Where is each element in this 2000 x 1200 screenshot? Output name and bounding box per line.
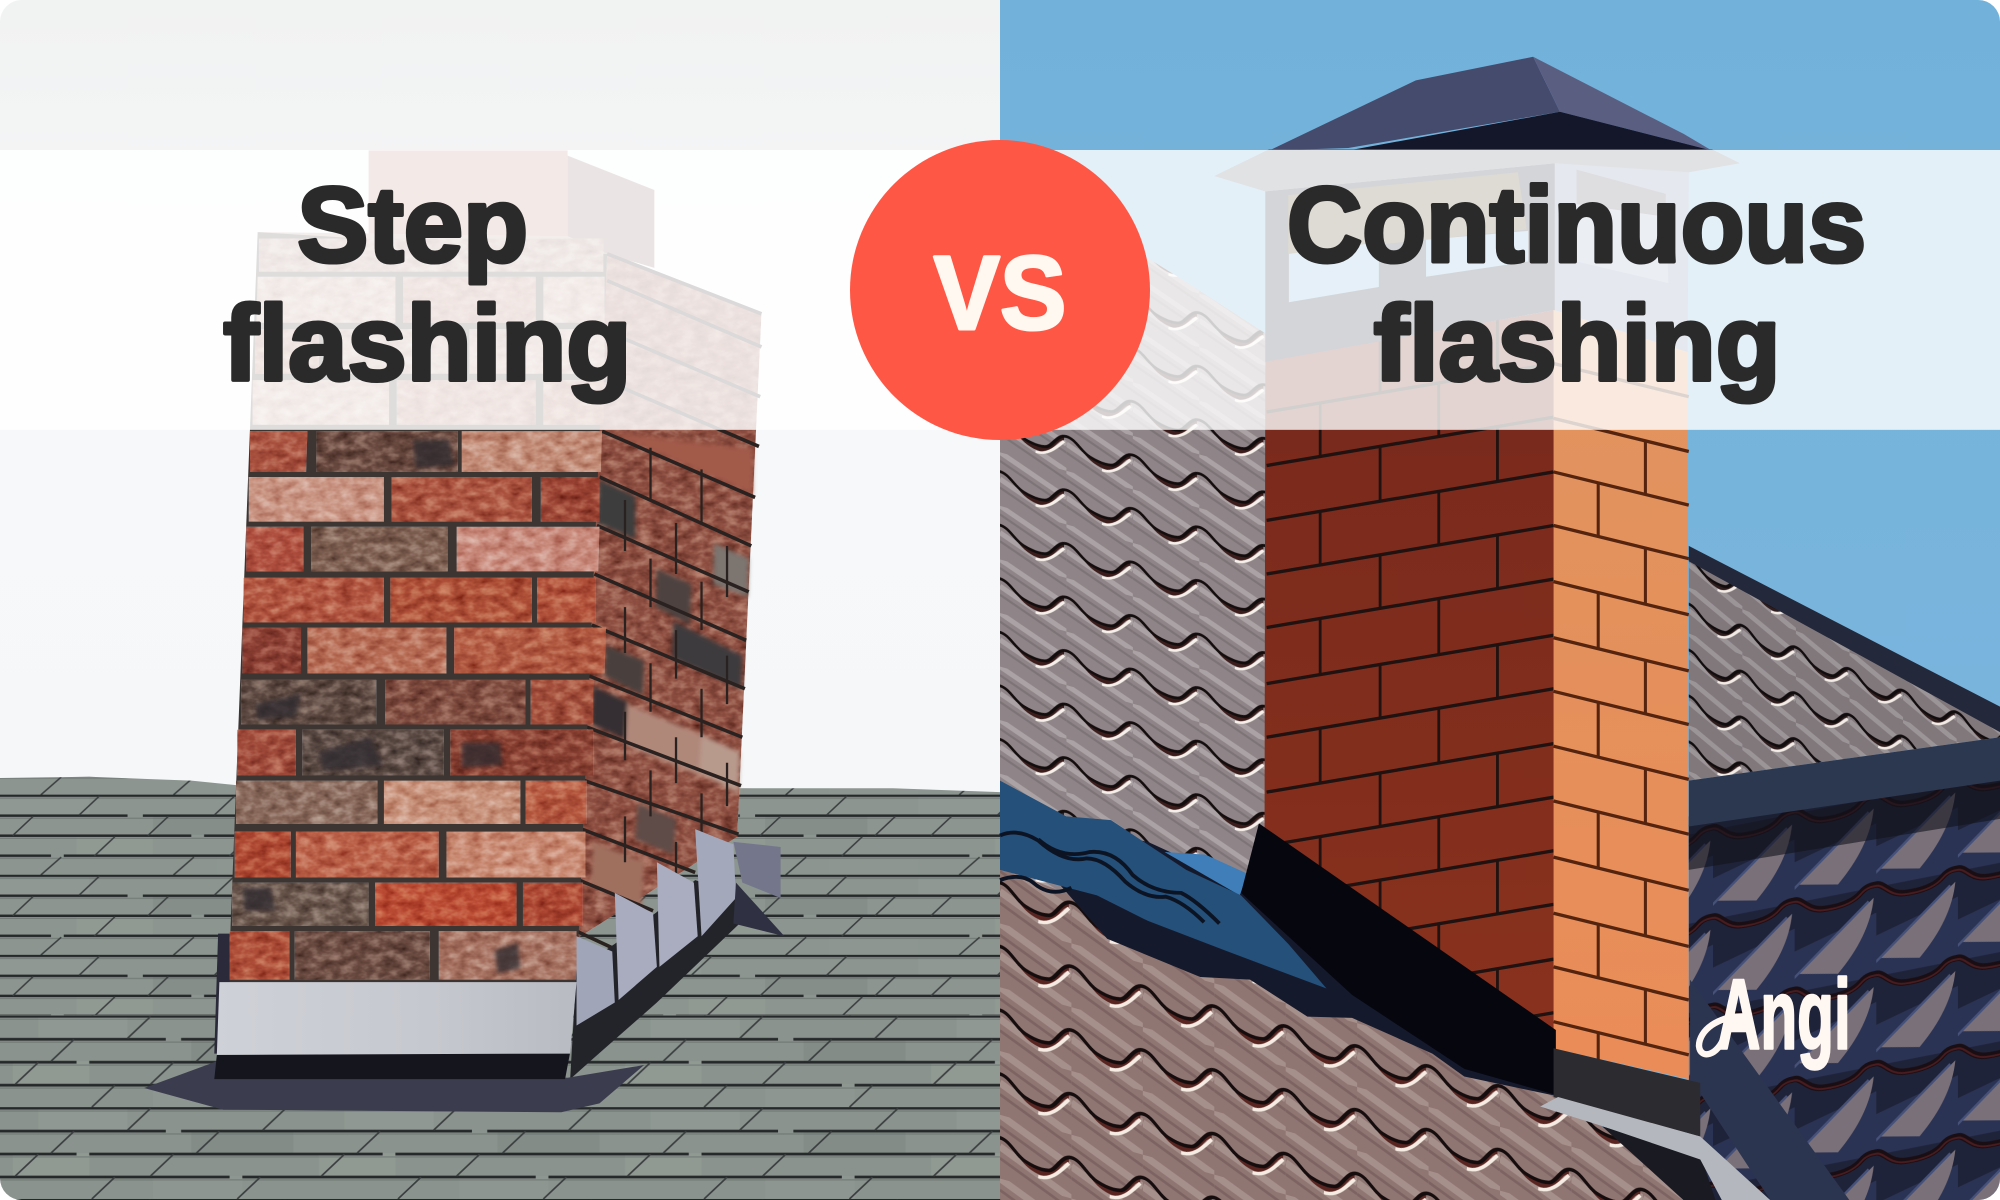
logo: Angi	[1699, 959, 1851, 1070]
brick chimney: crown	[261, 150, 654, 268]
logo: Angi: Angi	[1717, 959, 1851, 1070]
asphalt shingle roof	[0, 777, 1000, 1200]
step flashing: dark backing	[570, 880, 742, 1079]
course 4	[244, 578, 384, 622]
brick chimney: right side	[577, 254, 761, 949]
heading: step flashing: Step	[297, 164, 528, 284]
base flashing sheet	[144, 1061, 644, 1112]
course 10	[232, 883, 369, 926]
near roof: brown tiles	[1000, 867, 1690, 1200]
near roof: gray tiles	[1000, 258, 1266, 894]
shadow under apron	[214, 1052, 570, 1079]
far roof: dark tiles	[1689, 770, 2000, 1200]
black continuous flashing	[1241, 823, 1556, 1095]
valley strip	[1690, 980, 1849, 1200]
course 6	[241, 680, 376, 724]
brick chimney: front face	[1264, 310, 1555, 1028]
course 7	[237, 730, 296, 776]
course 8	[236, 781, 378, 824]
course 11	[230, 931, 290, 980]
heading: continuous flashing	[1287, 164, 1866, 403]
ridge shadow	[1060, 840, 1554, 1096]
far roof: dark ridge	[1689, 546, 2000, 732]
far roof: fascia	[1689, 737, 2000, 827]
silver valley metal	[1540, 1097, 1770, 1200]
panel: continuous flashing photo	[1000, 0, 2000, 1200]
heading: continuous flashing: flashing	[1374, 283, 1781, 403]
metal base flashing	[1554, 1048, 1700, 1136]
gap below valley metal	[1602, 1126, 1716, 1200]
course 1	[250, 431, 307, 472]
sky, right	[1000, 0, 2000, 1200]
course 3	[246, 527, 304, 571]
lantern cap	[1214, 57, 1740, 362]
step flashing: metal pieces	[577, 829, 784, 1026]
heading: step flashing	[223, 164, 631, 403]
course 9	[235, 832, 291, 878]
far roof: fascia shadow	[1689, 779, 2000, 870]
brick chimney: front face	[228, 232, 607, 985]
brick chimney: sunlit side	[1554, 310, 1689, 1079]
course 5	[242, 628, 301, 673]
left flange	[214, 934, 230, 1054]
heading: step flashing: flashing	[223, 283, 631, 403]
front apron flashing	[217, 982, 577, 1055]
blue ridge tiles	[1000, 781, 1327, 989]
sky, left	[0, 0, 1000, 792]
vs badge	[850, 140, 1150, 440]
course 2	[249, 477, 384, 522]
panel: step flashing photo	[0, 0, 1000, 1200]
vs badge: VS	[934, 235, 1066, 352]
band: left title background	[0, 150, 1000, 430]
heading: continuous flashing: Continuous	[1287, 164, 1866, 284]
band: right title background	[1000, 150, 2000, 430]
far roof: gray tiles	[1689, 559, 2000, 781]
